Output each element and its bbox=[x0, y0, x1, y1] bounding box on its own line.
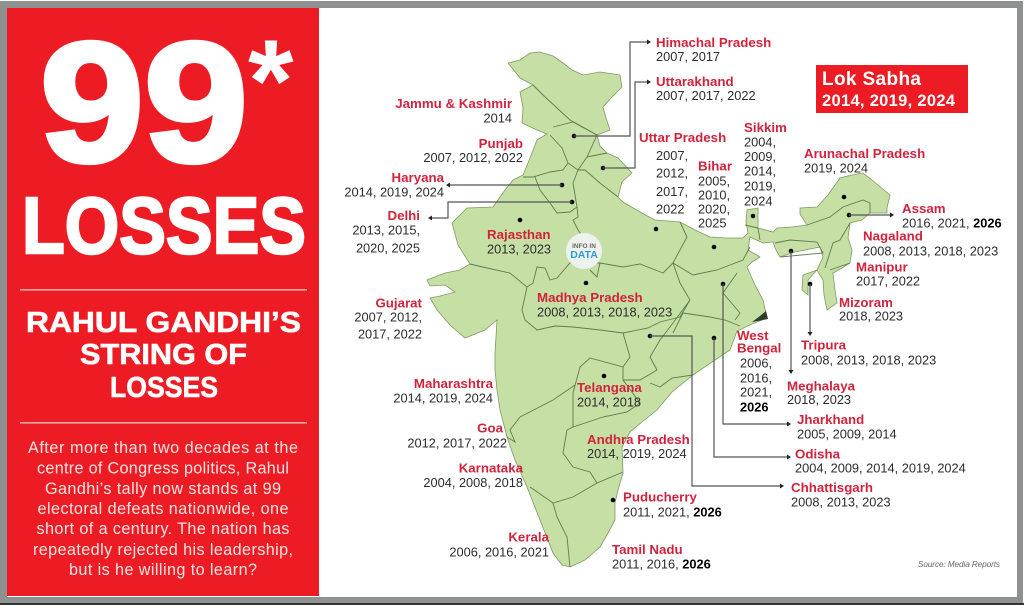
label: Sikkim: Sikkim bbox=[744, 120, 787, 135]
panel: red headline column bbox=[7, 8, 319, 596]
label: Nagaland bbox=[863, 228, 998, 258]
label: Goa: 2012, 2017, 2022 bbox=[407, 436, 507, 450]
label: Uttar Pradesh: 2012, bbox=[656, 166, 688, 180]
label: Chhattisgarh: 2008, 2013, 2023 bbox=[791, 494, 891, 510]
label: Delhi: 2013, 2015, bbox=[352, 222, 420, 238]
label: Sikkim: 2009, bbox=[744, 149, 776, 164]
subheading bbox=[26, 307, 301, 404]
label: Tamil Nadu bbox=[612, 542, 711, 572]
label: Jammu & Kashmir: 2014 bbox=[484, 110, 512, 126]
label: Jammu & Kashmir: Jammu & Kashmir bbox=[395, 96, 512, 111]
label: Assam: 2016, 2021, 2026 bbox=[902, 216, 1002, 230]
label: Maharashtra: Maharashtra bbox=[414, 376, 494, 391]
label: Jammu & Kashmir bbox=[395, 96, 512, 126]
label: Haryana bbox=[344, 170, 445, 200]
label: Madhya Pradesh bbox=[537, 290, 672, 320]
asterisk: * bbox=[248, 15, 294, 146]
label: Himachal Pradesh: 2007, 2017 bbox=[656, 49, 720, 64]
label: Arunachal Pradesh: 2019, 2024 bbox=[804, 160, 868, 176]
label: Sikkim: 2019, bbox=[744, 178, 776, 194]
label: Madhya Pradesh: Madhya Pradesh bbox=[537, 290, 643, 305]
label: Meghalaya bbox=[787, 378, 856, 407]
label: Goa: Goa bbox=[477, 420, 504, 436]
label: Sikkim: 2004, bbox=[744, 134, 776, 150]
label: Punjab: Punjab bbox=[479, 136, 523, 151]
label: Delhi: Delhi bbox=[387, 208, 420, 223]
label: Himachal Pradesh bbox=[656, 35, 771, 64]
label: Uttar Pradesh bbox=[639, 130, 726, 216]
label: Jharkhand: Jharkhand bbox=[797, 412, 864, 427]
label: Rajasthan: Rajasthan bbox=[487, 227, 551, 242]
label: Chhattisgarh: Chhattisgarh bbox=[791, 480, 873, 495]
label: Maharashtra bbox=[393, 376, 494, 406]
label: Kerala: Kerala bbox=[508, 530, 550, 544]
label: Nagaland: 2008, 2013, 2018, 2023 bbox=[863, 244, 998, 258]
label: Karnataka: Karnataka bbox=[459, 460, 524, 476]
subheading: LOSSES bbox=[110, 372, 218, 404]
label: Bihar: 2010, bbox=[698, 188, 730, 202]
logo: Info in Data: DATA bbox=[570, 249, 598, 261]
label: Telangana: Telangana bbox=[577, 380, 642, 395]
label: Puducherry: Puducherry bbox=[623, 490, 697, 504]
label: Uttar Pradesh: 2022 bbox=[656, 202, 684, 216]
label: Punjab: 2007, 2012, 2022 bbox=[423, 150, 523, 165]
label: Manipur bbox=[856, 260, 920, 288]
label: Nagaland: Nagaland bbox=[863, 228, 923, 244]
label: Mizoram: Mizoram bbox=[839, 295, 893, 310]
label: Manipur: 2017, 2022 bbox=[856, 274, 920, 288]
big number 99: 99 bbox=[40, 8, 248, 198]
callout: Lok Sabha: Lok Sabha bbox=[822, 69, 921, 90]
label: West Bengal: 2026 bbox=[740, 400, 768, 414]
label: Puducherry bbox=[623, 490, 722, 520]
label: Bihar: 2020, bbox=[698, 202, 730, 216]
label: Assam: Assam bbox=[902, 201, 946, 216]
label: West Bengal: West bbox=[737, 328, 769, 343]
label: West Bengal: Bengal bbox=[737, 340, 781, 356]
label: Odisha: Odisha bbox=[795, 446, 841, 462]
subheading: RAHUL GANDHI’S bbox=[26, 307, 301, 339]
label: Karnataka: 2004, 2008, 2018 bbox=[423, 475, 523, 490]
label: Andhra Pradesh: 2014, 2019, 2024 bbox=[587, 446, 687, 461]
logo: Info in Data bbox=[566, 233, 602, 269]
label: Uttarakhand: 2007, 2017, 2022 bbox=[656, 88, 756, 103]
label: Haryana: 2014, 2019, 2024 bbox=[344, 184, 444, 200]
label: Goa bbox=[407, 420, 507, 450]
callout: Lok Sabha bbox=[816, 65, 968, 113]
label: Jharkhand: 2005, 2009, 2014 bbox=[797, 426, 897, 442]
label: Punjab bbox=[423, 136, 523, 165]
body text: electoral defeats nationwide, one bbox=[38, 500, 288, 518]
label: Kerala bbox=[449, 530, 550, 560]
label: Bihar: 2025 bbox=[698, 216, 726, 230]
label: Delhi bbox=[352, 208, 420, 256]
logo: Info in Data: INFO IN bbox=[572, 243, 596, 250]
label: West Bengal: 2016, bbox=[740, 370, 772, 386]
callout: Lok Sabha: 2014, 2019, 2024 bbox=[822, 92, 956, 110]
subheading: STRING OF bbox=[80, 339, 247, 371]
label: Chhattisgarh bbox=[791, 480, 891, 510]
label: Rajasthan: 2013, 2023 bbox=[487, 242, 551, 256]
label: Bihar: 2005, bbox=[698, 174, 730, 188]
body text: centre of Congress politics, Rahul bbox=[37, 460, 289, 478]
label: Maharashtra: 2014, 2019, 2024 bbox=[393, 390, 493, 406]
label: Rajasthan bbox=[487, 227, 551, 256]
label: Jharkhand bbox=[797, 412, 897, 442]
body text: short of a century. The nation has bbox=[36, 520, 290, 538]
label: Delhi: 2020, 2025 bbox=[356, 240, 420, 256]
label: West Bengal: 2021, bbox=[740, 384, 772, 400]
label: Telangana bbox=[577, 380, 642, 410]
label: Gujarat: 2007, 2012, bbox=[354, 310, 422, 324]
label: Karnataka bbox=[423, 460, 524, 490]
Sundarbans mark bbox=[752, 311, 768, 322]
label: Uttarakhand bbox=[656, 74, 756, 103]
body text: After more than two decades at the bbox=[28, 439, 298, 457]
label: Sikkim: 2014, bbox=[744, 164, 776, 178]
label: Tamil Nadu: 2011, 2016, 2026 bbox=[612, 556, 711, 572]
leader arrows bbox=[428, 40, 894, 488]
label: Assam bbox=[902, 201, 1002, 230]
label: Tripura: 2008, 2013, 2018, 2023 bbox=[801, 352, 936, 368]
label: Kerala: 2006, 2016, 2021 bbox=[449, 544, 549, 560]
label: Gujarat: 2017, 2022 bbox=[358, 326, 422, 342]
label: Mizoram bbox=[839, 295, 903, 324]
label: Puducherry: 2011, 2021, 2026 bbox=[623, 504, 722, 520]
label: Meghalaya: Meghalaya bbox=[787, 378, 856, 394]
label: Uttar Pradesh: 2017, bbox=[656, 184, 688, 199]
headline LOSSES: LOSSES bbox=[22, 181, 306, 270]
label: Meghalaya: 2018, 2023 bbox=[787, 392, 851, 407]
label: Madhya Pradesh: 2008, 2013, 2018, 2023 bbox=[537, 304, 672, 320]
label: Gujarat bbox=[354, 296, 423, 342]
label: Sikkim bbox=[744, 120, 787, 208]
label: Tripura bbox=[801, 338, 936, 368]
label: Uttar Pradesh: 2007, bbox=[656, 148, 688, 163]
map of India bbox=[427, 40, 894, 567]
label: West Bengal: 2006, bbox=[740, 356, 772, 370]
body text: repeatedly rejected his leadership, bbox=[33, 541, 293, 559]
label: Sikkim: 2024 bbox=[744, 194, 772, 208]
label: Uttar Pradesh: Uttar Pradesh bbox=[639, 130, 726, 145]
label: Manipur: Manipur bbox=[856, 260, 908, 274]
state borders bbox=[470, 85, 870, 567]
label: Tamil Nadu: Tamil Nadu bbox=[612, 542, 683, 557]
body text: but is he willing to learn? bbox=[69, 561, 257, 579]
source note: Source: Media Reports bbox=[918, 560, 1000, 569]
label: Tripura: Tripura bbox=[801, 338, 847, 352]
label: Gujarat: Gujarat bbox=[375, 296, 423, 310]
label: Uttarakhand: Uttarakhand bbox=[656, 74, 734, 89]
body text: Gandhi’s tally now stands at 99 bbox=[45, 480, 281, 498]
label: Mizoram: 2018, 2023 bbox=[839, 308, 903, 324]
label: Bihar bbox=[698, 158, 732, 230]
label: Andhra Pradesh: Andhra Pradesh bbox=[587, 432, 690, 447]
label: West Bengal bbox=[737, 328, 781, 414]
body text bbox=[28, 439, 298, 579]
label: Arunachal Pradesh bbox=[804, 146, 925, 176]
label: Himachal Pradesh: Himachal Pradesh bbox=[656, 35, 771, 50]
label: Bihar: Bihar bbox=[698, 158, 732, 174]
label: Telangana: 2014, 2018 bbox=[577, 394, 641, 410]
label: Arunachal Pradesh: Arunachal Pradesh bbox=[804, 146, 925, 161]
label: Haryana: Haryana bbox=[392, 170, 445, 185]
label: Odisha bbox=[795, 446, 966, 476]
location dots bbox=[518, 134, 851, 502]
label: Andhra Pradesh bbox=[587, 432, 690, 461]
label: Odisha: 2004, 2009, 2014, 2019, 2024 bbox=[795, 460, 966, 476]
